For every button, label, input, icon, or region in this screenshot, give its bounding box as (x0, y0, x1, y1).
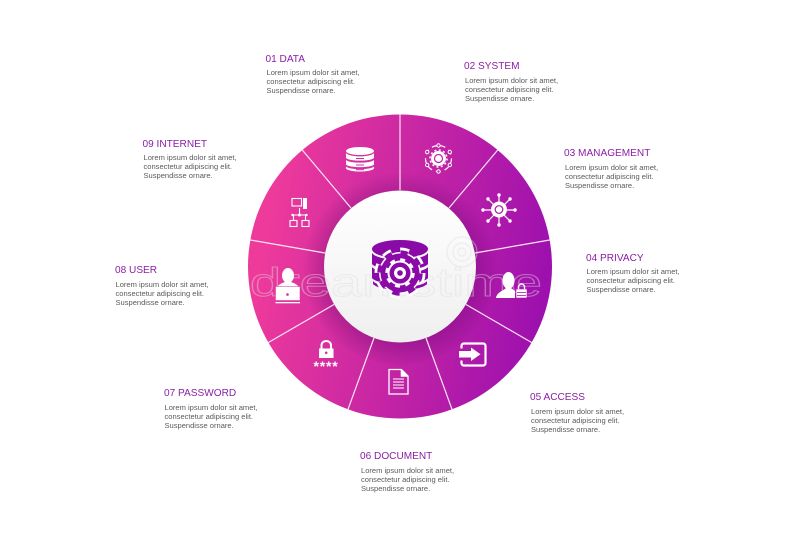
label: 05 access: 05 ACCESS (530, 392, 585, 403)
label: 07 password: Lorem ipsum dolor sit amet, (164, 403, 258, 412)
watermark: dreamstime (250, 261, 542, 305)
label: 07 password (164, 388, 258, 430)
label: 02 system: Suspendisse ornare. (465, 94, 534, 103)
label: 09 internet (142, 139, 237, 180)
label: 06 document (360, 451, 454, 493)
icon: user with laptop (276, 268, 300, 303)
label: 07 password: Suspendisse ornare. (164, 421, 234, 430)
label: 08 user: 08 USER (115, 265, 157, 276)
ring chart (248, 114, 552, 418)
label: 01 data: consectetur adipiscing elit. (266, 77, 355, 86)
label: 06 document: 06 DOCUMENT (360, 451, 432, 462)
label: 06 document: Lorem ipsum dolor sit amet, (361, 466, 454, 475)
label: 02 system: consectetur adipiscing elit. (465, 85, 554, 94)
icon: password lock: **** (314, 358, 338, 374)
label: 03 management: 03 MANAGEMENT (564, 148, 650, 159)
icon: database with gear (372, 240, 428, 296)
label: 03 management: Suspendisse ornare. (565, 181, 634, 190)
label: 08 user: Suspendisse ornare. (116, 298, 185, 307)
label: 04 privacy: Suspendisse ornare. (586, 285, 656, 294)
icon: password lock (314, 341, 338, 374)
icon: privacy person with lock (496, 272, 527, 298)
label: 05 access: consectetur adipiscing elit. (531, 416, 620, 425)
label: 06 document: consectetur adipiscing elit. (361, 475, 450, 484)
label: 01 data: 01 DATA (266, 54, 305, 65)
label: 02 system: 02 SYSTEM (464, 61, 520, 72)
icon: internet network (290, 198, 309, 226)
icon: access arrow (459, 344, 486, 366)
label: 05 access: Suspendisse ornare. (531, 425, 600, 434)
label: 05 access (530, 392, 624, 434)
icon: management network gear (481, 193, 517, 227)
label: 02 system (464, 61, 558, 103)
label: 04 privacy (586, 253, 680, 294)
label: 06 document: Suspendisse ornare. (361, 484, 430, 493)
label: 04 privacy: 04 PRIVACY (586, 253, 644, 264)
label: 09 internet: consectetur adipiscing elit. (144, 162, 232, 171)
label: 05 access: Lorem ipsum dolor sit amet, (531, 407, 624, 416)
label: 03 management: consectetur adipiscing elit. (565, 172, 654, 181)
label: 01 data: Lorem ipsum dolor sit amet, (266, 68, 360, 77)
label: 09 internet: 09 INTERNET (142, 139, 207, 150)
label: 07 password: consectetur adipiscing elit. (164, 412, 253, 421)
watermark (250, 237, 542, 305)
icon: system gear (426, 144, 452, 173)
label: 03 management: Lorem ipsum dolor sit amet, (565, 163, 658, 172)
label: 07 password: 07 PASSWORD (164, 388, 236, 399)
label: 04 privacy: consectetur adipiscing elit. (586, 276, 675, 285)
label: 08 user: Lorem ipsum dolor sit amet, (116, 280, 209, 289)
label: 09 internet: Suspendisse ornare. (144, 171, 213, 180)
label: 01 data (266, 54, 360, 95)
label: 02 system: Lorem ipsum dolor sit amet, (465, 76, 558, 85)
label: 04 privacy: Lorem ipsum dolor sit amet, (586, 267, 680, 276)
label: 08 user: consectetur adipiscing elit. (116, 289, 204, 298)
label: 01 data: Suspendisse ornare. (266, 86, 336, 95)
label: 03 management (564, 148, 658, 190)
centre disc (324, 190, 476, 342)
icon: data server (346, 147, 374, 172)
label: 08 user (115, 265, 209, 307)
label: 09 internet: Lorem ipsum dolor sit amet, (144, 153, 237, 162)
icon: document (389, 370, 408, 394)
